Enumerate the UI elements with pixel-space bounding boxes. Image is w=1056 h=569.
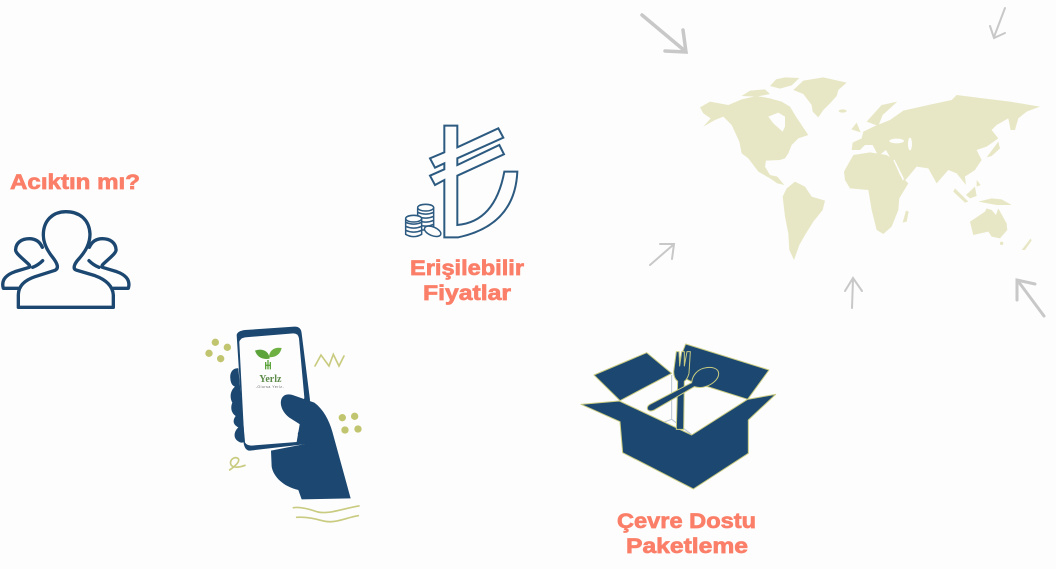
arrow: top right	[990, 8, 1005, 38]
illustration: hand holding phone	[205, 327, 362, 522]
spoon	[647, 367, 719, 411]
Japan	[987, 120, 1016, 157]
fingers	[230, 368, 245, 443]
Hudson Bay	[768, 113, 785, 132]
world map	[700, 77, 1040, 260]
zigzag and squiggles	[230, 354, 359, 522]
New Zealand	[1022, 238, 1032, 250]
heading: Erişilebilir Fiyatlar: Fiyatlar	[423, 282, 511, 305]
app logo: sprout and fork: Yerlz	[259, 374, 282, 385]
Arctic islands	[742, 77, 799, 97]
arrow: lower middle	[845, 278, 862, 308]
Eurasia	[852, 95, 1040, 185]
box front with side flaps	[581, 394, 776, 489]
arrow: top left	[642, 15, 686, 52]
lira symbol	[430, 126, 517, 237]
heading: Erişilebilir Fiyatlar: Erişilebilir	[410, 257, 524, 280]
icon: group of people	[3, 212, 129, 307]
hand and thumb	[271, 394, 351, 499]
decorative dots	[205, 339, 362, 434]
back right flap	[674, 344, 769, 399]
heading: Çevre Dostu Paketleme: Çevre Dostu	[617, 510, 756, 533]
Southeast Asia islands	[953, 180, 1012, 205]
inland seas	[889, 138, 912, 180]
Iceland	[839, 109, 847, 113]
coin stacks	[406, 204, 442, 239]
box interior	[620, 375, 748, 435]
heading: Çevre Dostu Paketleme	[617, 510, 756, 558]
Scandinavia	[867, 102, 897, 126]
arrow: lower right	[1017, 280, 1044, 316]
arrows	[642, 8, 1044, 316]
heading: Acıktın mı?: Acıktın mı?	[10, 171, 140, 194]
Africa	[844, 152, 908, 234]
South America	[783, 182, 825, 260]
heading: Erişilebilir Fiyatlar	[410, 257, 524, 305]
app logo: sprout and fork	[255, 348, 284, 389]
fork	[674, 352, 690, 429]
back left flap	[594, 353, 672, 401]
UK	[851, 123, 861, 132]
North America	[700, 96, 808, 185]
phone body	[237, 327, 310, 451]
heading: Çevre Dostu Paketleme: Paketleme	[626, 535, 748, 558]
illustration: open box with fork and spoon	[581, 344, 776, 489]
Greenland	[793, 77, 847, 117]
icon: lira symbol with coins	[406, 126, 517, 239]
Madagascar	[903, 211, 909, 223]
arrow: lower left	[650, 244, 674, 265]
Australia	[970, 208, 1007, 238]
app logo: sprout and fork: -Olursa Yerlz-	[256, 385, 284, 389]
phone screen	[239, 333, 304, 446]
Tasmania	[1000, 242, 1003, 245]
